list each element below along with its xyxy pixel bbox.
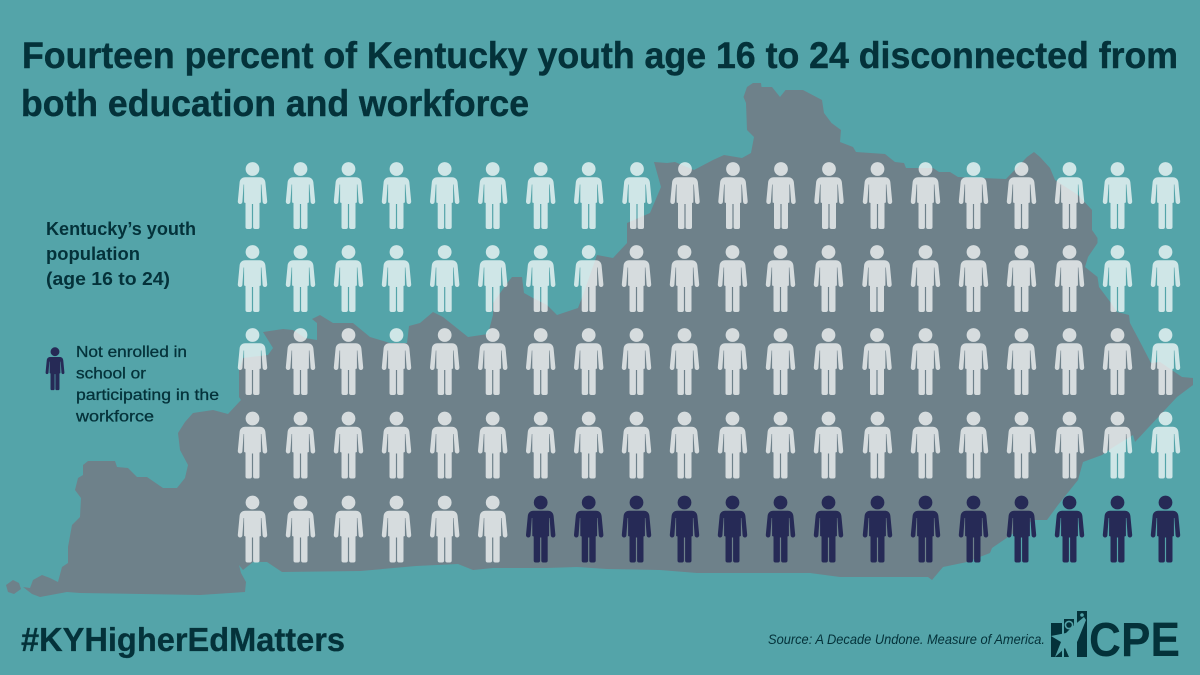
CPE logo bbox=[1051, 611, 1180, 667]
row 2 of people bbox=[238, 245, 1180, 312]
pictogram: people grid bbox=[238, 162, 1180, 562]
row 1 of people bbox=[238, 162, 1180, 229]
row 5 of people: light bbox=[238, 496, 507, 562]
logo wordmark: CPE bbox=[1089, 614, 1180, 667]
row 3 of people bbox=[238, 328, 1180, 395]
legend icon: person bbox=[46, 347, 64, 390]
legend heading: (age 16 to 24) bbox=[46, 269, 170, 289]
map: small western island bbox=[6, 580, 21, 594]
legend heading: Kentucky’s youth bbox=[46, 219, 196, 239]
legend text: workforce bbox=[75, 408, 154, 426]
row 4 of people bbox=[238, 412, 1180, 478]
logo icon: bars and figure bbox=[1051, 611, 1087, 657]
legend text bbox=[75, 344, 219, 426]
source: Source: A Decade Undone. Measure of America. bbox=[768, 631, 1045, 647]
hashtag: #KYHigherEdMatters bbox=[21, 621, 345, 658]
legend text: school or bbox=[76, 366, 147, 382]
legend text: Not enrolled in bbox=[76, 344, 187, 361]
legend heading: population bbox=[46, 244, 140, 264]
title bbox=[21, 34, 1178, 124]
title: both education and workforce bbox=[21, 82, 529, 124]
legend heading bbox=[46, 219, 196, 289]
map of Kentucky bbox=[6, 83, 1193, 597]
row 5 of people: dark, not enrolled or working bbox=[526, 496, 1180, 562]
legend text: participating in the bbox=[76, 387, 219, 404]
